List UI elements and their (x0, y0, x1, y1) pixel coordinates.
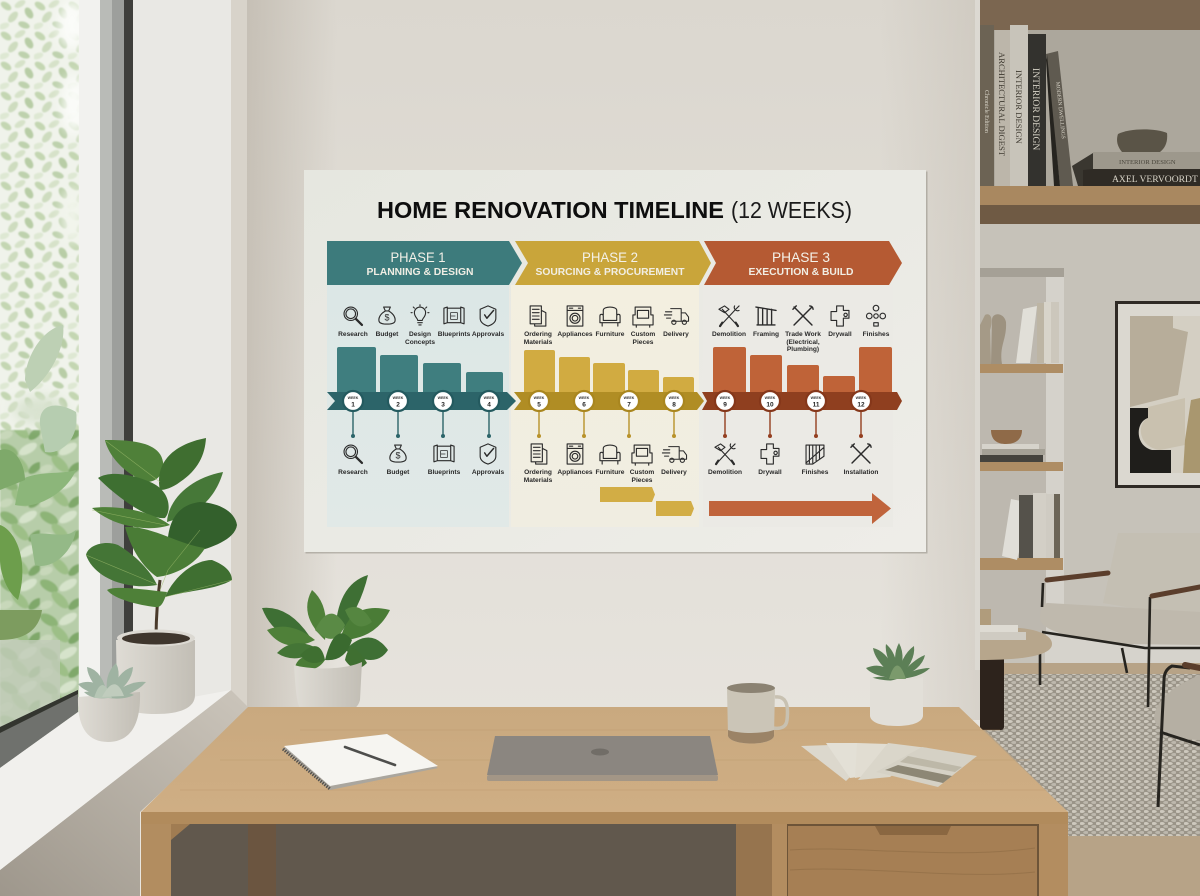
upper wooden shelf (980, 186, 1200, 224)
week markers phase 3: 11 (813, 402, 820, 408)
phase 3 header arrow: PHASE 3 (772, 249, 830, 265)
week markers phase 2: 6 (582, 402, 586, 408)
books on upper shelf: INTERIOR DESIGN (1119, 159, 1176, 166)
phase 3 top tasks: Framing (753, 331, 779, 338)
panel: phase 3 background (703, 285, 893, 527)
phase 2 top tasks: Furniture (596, 331, 625, 338)
fig pot (116, 630, 195, 714)
phase 2 bottom tasks: Custom (630, 469, 654, 476)
week markers phase 3: WEEK (720, 396, 731, 400)
phase 2 top tasks (524, 306, 689, 346)
phase 3 bottom tasks: Installation (844, 469, 878, 476)
phase 1 top tasks (338, 305, 504, 346)
phase 3 bottom tasks (708, 444, 878, 476)
week markers phase 3: WEEK (811, 396, 822, 400)
week markers phase 1: 2 (396, 402, 400, 408)
books on upper shelf: Chronicle Edition (983, 90, 989, 133)
phase 1 bottom tasks: Research (338, 469, 368, 476)
gantt bar: delivery (656, 501, 694, 516)
laptop (487, 736, 718, 781)
week markers phase 2: WEEK (534, 396, 545, 400)
week markers phase 3: WEEK (856, 396, 867, 400)
phase 2 bottom tasks: Delivery (661, 469, 687, 476)
phase 3 top tasks: Demolition (712, 331, 746, 338)
window reveal and sill (0, 0, 247, 896)
phase 1 top tasks: Budget (376, 331, 399, 338)
phase 3 timeline ribbon (702, 392, 902, 410)
phase 2 top tasks: Pieces (633, 339, 654, 346)
phase 2 header arrow: PHASE 2 (582, 249, 638, 265)
title duration: (12 WEEKS) (731, 197, 852, 223)
coffee mug (727, 683, 788, 744)
phase 3 top tasks (712, 305, 890, 353)
baseboard (1045, 637, 1200, 663)
phase 3 top tasks: Drywall (828, 331, 852, 338)
phase 2 bottom tasks: Ordering (524, 469, 552, 476)
books on upper shelf: MODERN DWELLINGS (1054, 82, 1066, 139)
books on upper shelf: INTERIOR DESIGN (1030, 68, 1041, 150)
week markers phase 2: WEEK (669, 396, 680, 400)
title: HOME RENOVATION TIMELINE (377, 197, 724, 223)
phase 2 bottom tasks: Materials (524, 477, 553, 484)
succulent on sill (78, 663, 146, 742)
phase 2 top tasks: Ordering (524, 331, 552, 338)
phase 1 bottom tasks: Approvals (472, 469, 504, 476)
phase 2 header arrow: SOURCING & PROCUREMENT (536, 266, 685, 278)
week markers phase 3: 9 (723, 402, 727, 408)
phase 3 header arrow: EXECUTION & BUILD (748, 266, 854, 278)
phase 2 header arrow (515, 241, 711, 285)
phase 1 top tasks: Design (409, 331, 431, 338)
desk plant (262, 575, 390, 725)
books on upper shelf (980, 25, 1200, 186)
phase 2 bottom tasks: Pieces (632, 477, 653, 484)
bar chart: phase 2 workload (524, 350, 694, 392)
phase 3 top tasks: Trade Work (785, 331, 821, 338)
phase 1 top tasks: Concepts (405, 339, 435, 346)
arrow: execution duration (709, 493, 891, 524)
notebook with pen (282, 734, 438, 790)
built-in niche with shelves (980, 268, 1064, 640)
phase 1 header arrow (327, 241, 522, 285)
books on upper shelf: INTERIOR DESIGN (1014, 70, 1024, 145)
panel: phase 2 background (511, 285, 699, 527)
phase 2 bottom tasks (524, 444, 687, 484)
window with garden foliage (0, 0, 86, 740)
books on upper shelf: ARCHITECTURAL DIGEST (997, 52, 1007, 157)
phase 1 top tasks: Approvals (472, 331, 504, 338)
week markers phase 2: 7 (627, 402, 631, 408)
week markers phase 2: 5 (537, 402, 541, 408)
side table with books (980, 609, 1052, 730)
armchair (1040, 533, 1200, 707)
week markers phase 1: 4 (487, 402, 491, 408)
phase 1 bottom tasks: Budget (387, 469, 410, 476)
woven rug (985, 674, 1200, 836)
week markers phase 1: WEEK (393, 396, 404, 400)
bar chart: phase 1 workload (337, 347, 503, 392)
wall poster: home renovation timeline (304, 170, 928, 554)
phase 2 top tasks: Delivery (663, 331, 689, 338)
phase 1 header arrow: PLANNING & DESIGN (366, 266, 474, 278)
phase 2 bottom tasks: Furniture (596, 469, 625, 476)
fiddle leaf fig plant (86, 438, 237, 640)
phase 1 bottom tasks: Blueprints (428, 469, 461, 476)
week markers phase 1: 3 (441, 402, 445, 408)
phase 3 top tasks: Finishes (863, 331, 890, 338)
phase 1 timeline ribbon (327, 392, 516, 410)
phase 3 bottom tasks: Finishes (802, 469, 829, 476)
second armchair (1154, 665, 1200, 807)
phase 2 bottom tasks: Appliances (557, 469, 593, 476)
phase 3 bottom tasks: Demolition (708, 469, 742, 476)
week markers phase 3: 10 (766, 402, 774, 408)
phase 2 timeline ribbon (514, 392, 704, 410)
week markers phase 2: WEEK (624, 396, 635, 400)
phase 1 top tasks: Research (338, 331, 368, 338)
phase 1 top tasks: Blueprints (438, 331, 471, 338)
window frame (0, 0, 133, 768)
phase 1 header arrow: PHASE 1 (390, 249, 446, 265)
week markers phase 1: WEEK (484, 396, 495, 400)
phase 3 top tasks: (Electrical, (786, 339, 820, 346)
week markers phase 1 (343, 391, 499, 438)
week markers phase 2: WEEK (579, 396, 590, 400)
books on upper shelf: AXEL VERVOORDT (1112, 174, 1198, 185)
phase 3 bottom tasks: Drywall (758, 469, 782, 476)
phase 2 top tasks: Appliances (557, 331, 593, 338)
framed abstract art (1115, 301, 1200, 488)
week markers phase 1: WEEK (438, 396, 449, 400)
floor (980, 663, 1200, 896)
wall side shading (247, 0, 980, 720)
panel: phase 1 background (327, 285, 509, 527)
week markers phase 2: 8 (672, 402, 676, 408)
week markers phase 1: 1 (351, 402, 355, 408)
week markers phase 3 (715, 391, 871, 438)
gantt bar: furniture and custom pieces (600, 487, 655, 502)
phase 3 header arrow (704, 241, 902, 285)
bar chart: phase 3 workload (713, 347, 892, 392)
desk succulent (866, 643, 930, 726)
week markers phase 3: 12 (857, 402, 865, 408)
phase 3 top tasks: Plumbing) (787, 346, 819, 353)
week markers phase 3: WEEK (765, 396, 776, 400)
week markers phase 1: WEEK (348, 396, 359, 400)
phase 2 top tasks: Custom (631, 331, 655, 338)
paint swatches (801, 743, 977, 787)
phase 1 bottom tasks (338, 444, 504, 476)
desk (141, 707, 1068, 896)
week markers phase 2 (529, 391, 684, 438)
phase 2 top tasks: Materials (524, 339, 553, 346)
upper right shelf alcove (975, 0, 1200, 674)
